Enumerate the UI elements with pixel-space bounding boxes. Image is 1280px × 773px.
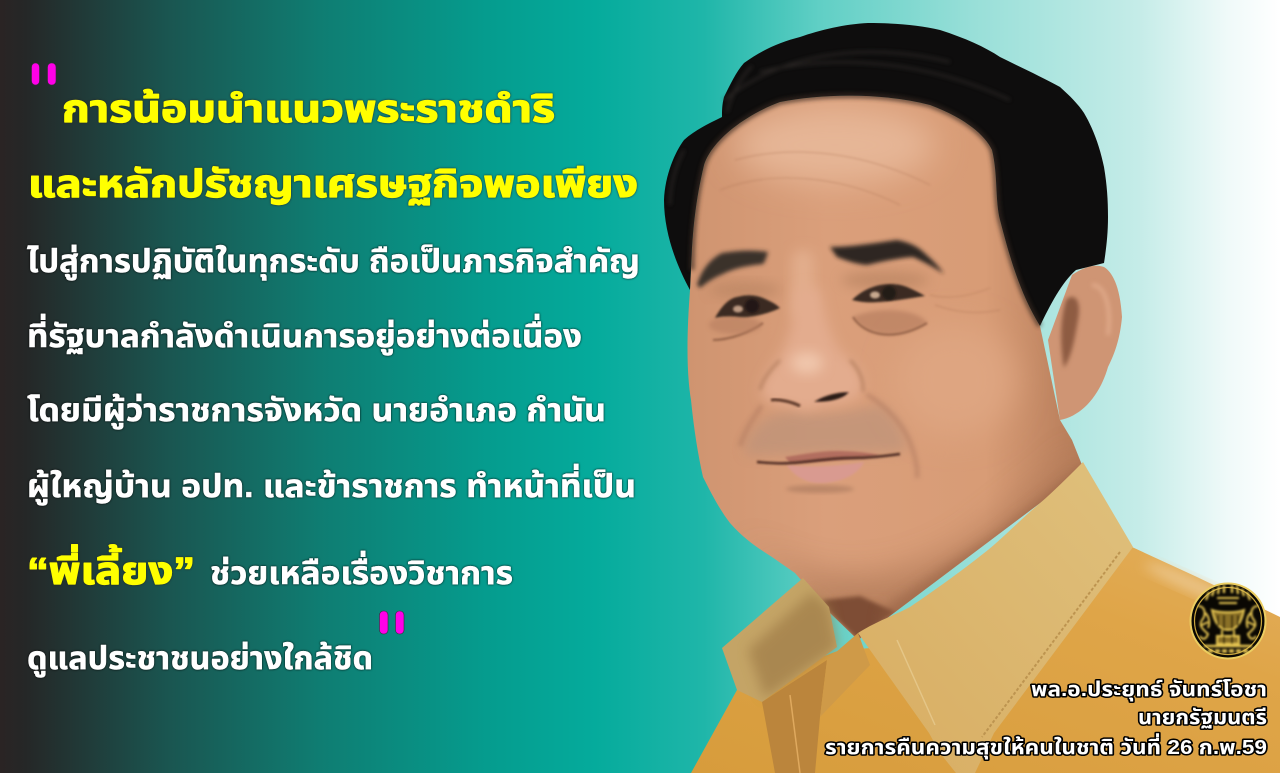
- quote body: [27, 243, 640, 677]
- hair sheen and soft edge: [670, 52, 1010, 205]
- opening quotation mark: [32, 63, 56, 85]
- attribution: นายกรัฐมนตรี: [1138, 707, 1267, 729]
- attribution: รายการคืนความสุขให้คนในชาติ วันที่ 26 ก.พ.59: [825, 733, 1267, 759]
- stubble above lip: [745, 405, 906, 455]
- shadow around the brows and eyes: [841, 271, 929, 289]
- right collar: [858, 462, 1133, 773]
- neck shadow: [822, 596, 895, 640]
- under lip area: [786, 485, 854, 493]
- quote body: ไปสู่การปฏิบัติในทุกระดับ ถือเป็นภารกิจสำคัญ: [27, 243, 640, 280]
- quote body: “พี่เลี้ยง”: [27, 544, 195, 593]
- face shading: [709, 107, 1090, 650]
- seal filigree: [1198, 585, 1258, 651]
- placket: [762, 660, 827, 773]
- attribution: พล.อ.ประยุทธ์ จันทร์โอชา: [1031, 679, 1267, 701]
- jaw shadow: [780, 462, 1082, 638]
- emblem seal: [1190, 584, 1266, 658]
- quote headline: [28, 89, 638, 206]
- quote body: ที่รัฐบาลกำลังดำเนินการอยู่อย่างต่อเนื่อง: [27, 313, 582, 355]
- eyes: [715, 284, 925, 318]
- quote body: ดูแลประชาชนอย่างใกล้ชิด: [27, 640, 373, 677]
- quote headline: และหลักปรัชญาเศรษฐกิจพอเพียง: [28, 164, 638, 206]
- wrinkles: [740, 151, 908, 185]
- hair: [664, 23, 1108, 326]
- nose: [760, 287, 863, 410]
- eye bags: [853, 310, 927, 334]
- quote body: โดยมีผู้ว่าราชการจังหวัด นายอำเภอ กำนัน: [27, 392, 606, 429]
- nasolabial folds: [740, 394, 917, 478]
- quote body: ผู้ใหญ่บ้าน อปท. และข้าราชการ ทำหน้าที่เป็น: [27, 463, 636, 505]
- eyebrows: [697, 251, 768, 288]
- quote body: ช่วยเหลือเรื่องวิชาการ: [210, 550, 513, 591]
- face: [688, 96, 1084, 640]
- quote headline: การน้อมนำแนวพระราชดำริ: [62, 89, 555, 131]
- mouth: [757, 451, 900, 483]
- closing quotation mark: [380, 611, 404, 634]
- ear: [1048, 266, 1122, 420]
- portrait photo of the prime minister: [664, 23, 1280, 773]
- shirt body: [691, 547, 1280, 773]
- left collar: [722, 578, 837, 702]
- attribution: [825, 679, 1267, 759]
